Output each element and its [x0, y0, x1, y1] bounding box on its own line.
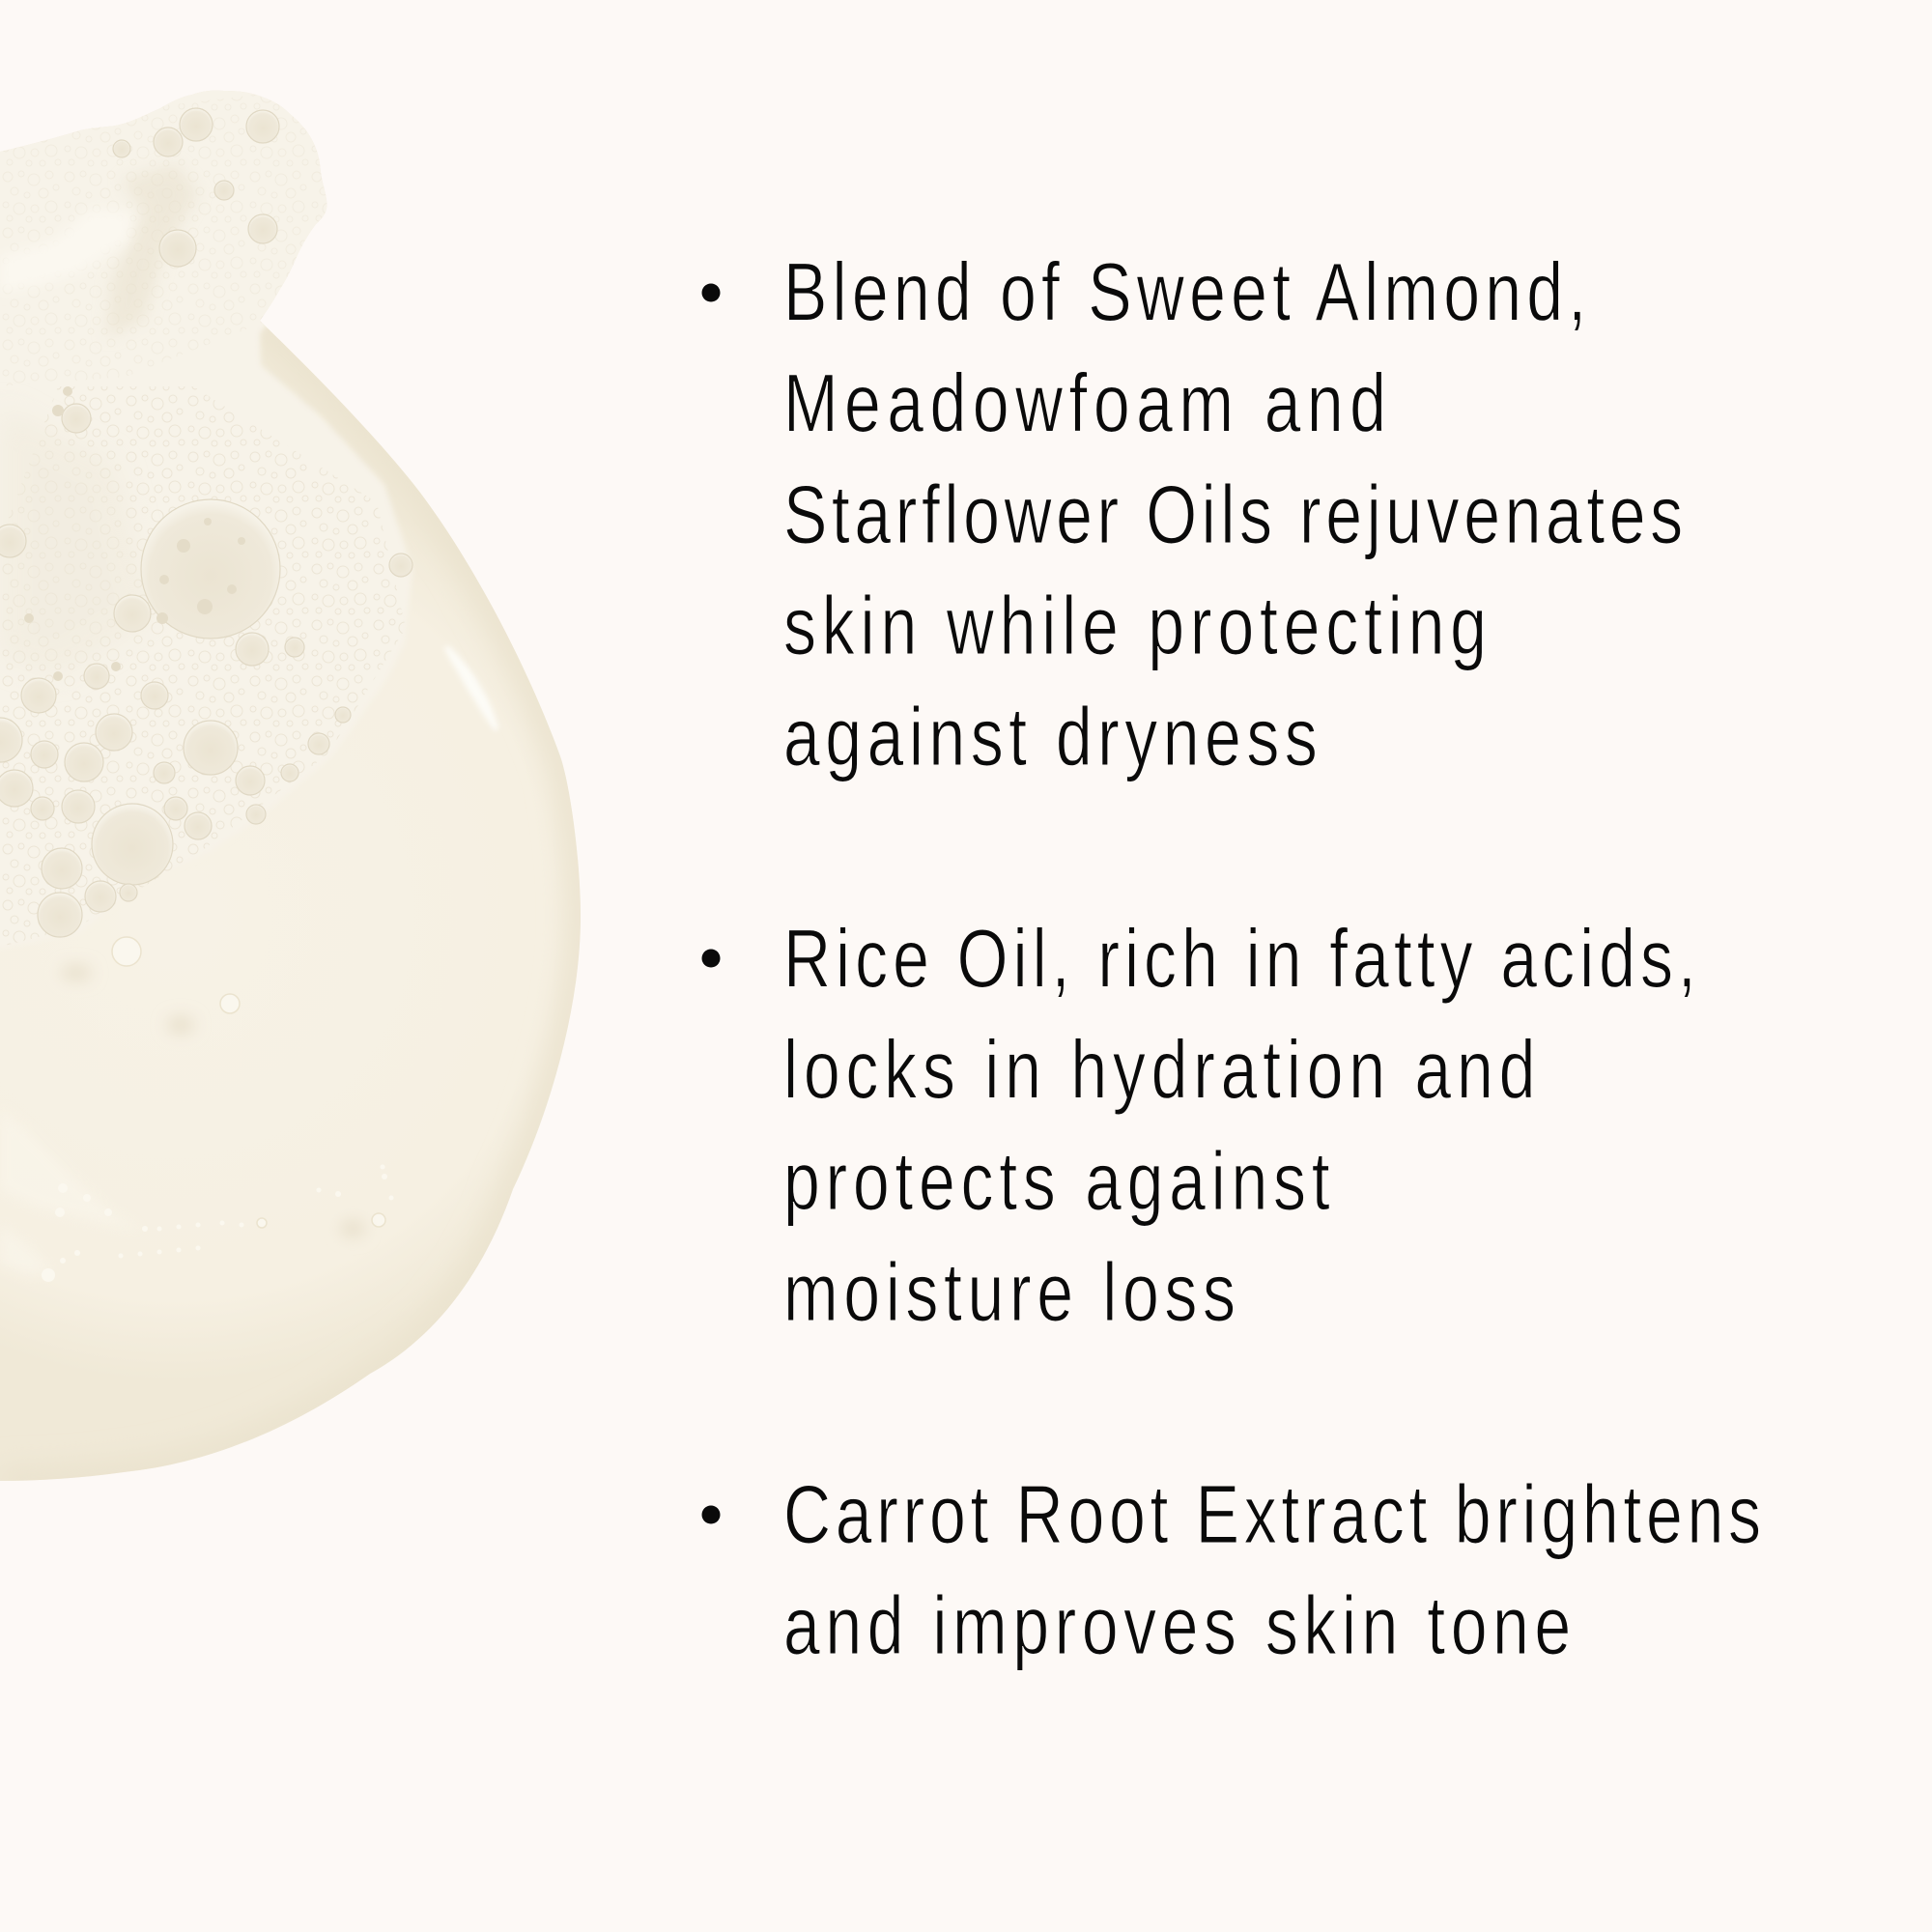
- liquid shadow spots: [61, 965, 365, 1237]
- bullet 2: rice oil: protects against: [783, 1136, 1330, 1228]
- liquid bubbles: [112, 937, 385, 1228]
- glossy highlight streak: [446, 647, 497, 729]
- inner bubbles of large foam bubble: [24, 386, 245, 681]
- foam shaded mass: [0, 406, 155, 676]
- bullet 2: rice oil: moisture loss: [783, 1247, 1236, 1339]
- product swatch: foamy oil droplet: [0, 58, 599, 1497]
- foam shadow streak: [108, 167, 195, 330]
- darker rim of droplet: [0, 321, 581, 1481]
- bullet 2: rice oil: [701, 913, 1696, 1339]
- foam layer: [0, 58, 412, 949]
- large foam bubbles: [0, 108, 412, 937]
- bullet 1: oils blend: Starflower Oils rejuvenates: [783, 469, 1683, 561]
- bullet 1: oils blend: against dryness: [783, 692, 1318, 783]
- bullet 3: carrot root extract: [701, 1469, 1761, 1672]
- liquid body: [0, 327, 581, 1481]
- bullet 2: rice oil: locks in hydration and: [783, 1024, 1535, 1116]
- bullet 1: oils blend: [701, 246, 1683, 783]
- tiny bubble trails: [42, 1165, 394, 1282]
- foam white highlight: [0, 209, 132, 293]
- bullet 1: oils blend: skin while protecting: [783, 581, 1487, 672]
- bullet 2: rice oil: Rice Oil, rich in fatty acids,: [783, 913, 1696, 1005]
- infographic canvas: [0, 91, 1758, 1670]
- lower left foam patch: [0, 1109, 140, 1231]
- lower left foam tail: [0, 1225, 52, 1275]
- bullet 3: carrot root extract: Carrot Root Extract brightens: [783, 1469, 1761, 1561]
- bullet 1: oils blend: Meadowfoam and: [783, 357, 1386, 449]
- bullet 3: carrot root extract: and improves skin tone: [783, 1580, 1571, 1672]
- benefits list: [701, 246, 1761, 1672]
- bullet 1: oils blend: Blend of Sweet Almond,: [783, 246, 1586, 338]
